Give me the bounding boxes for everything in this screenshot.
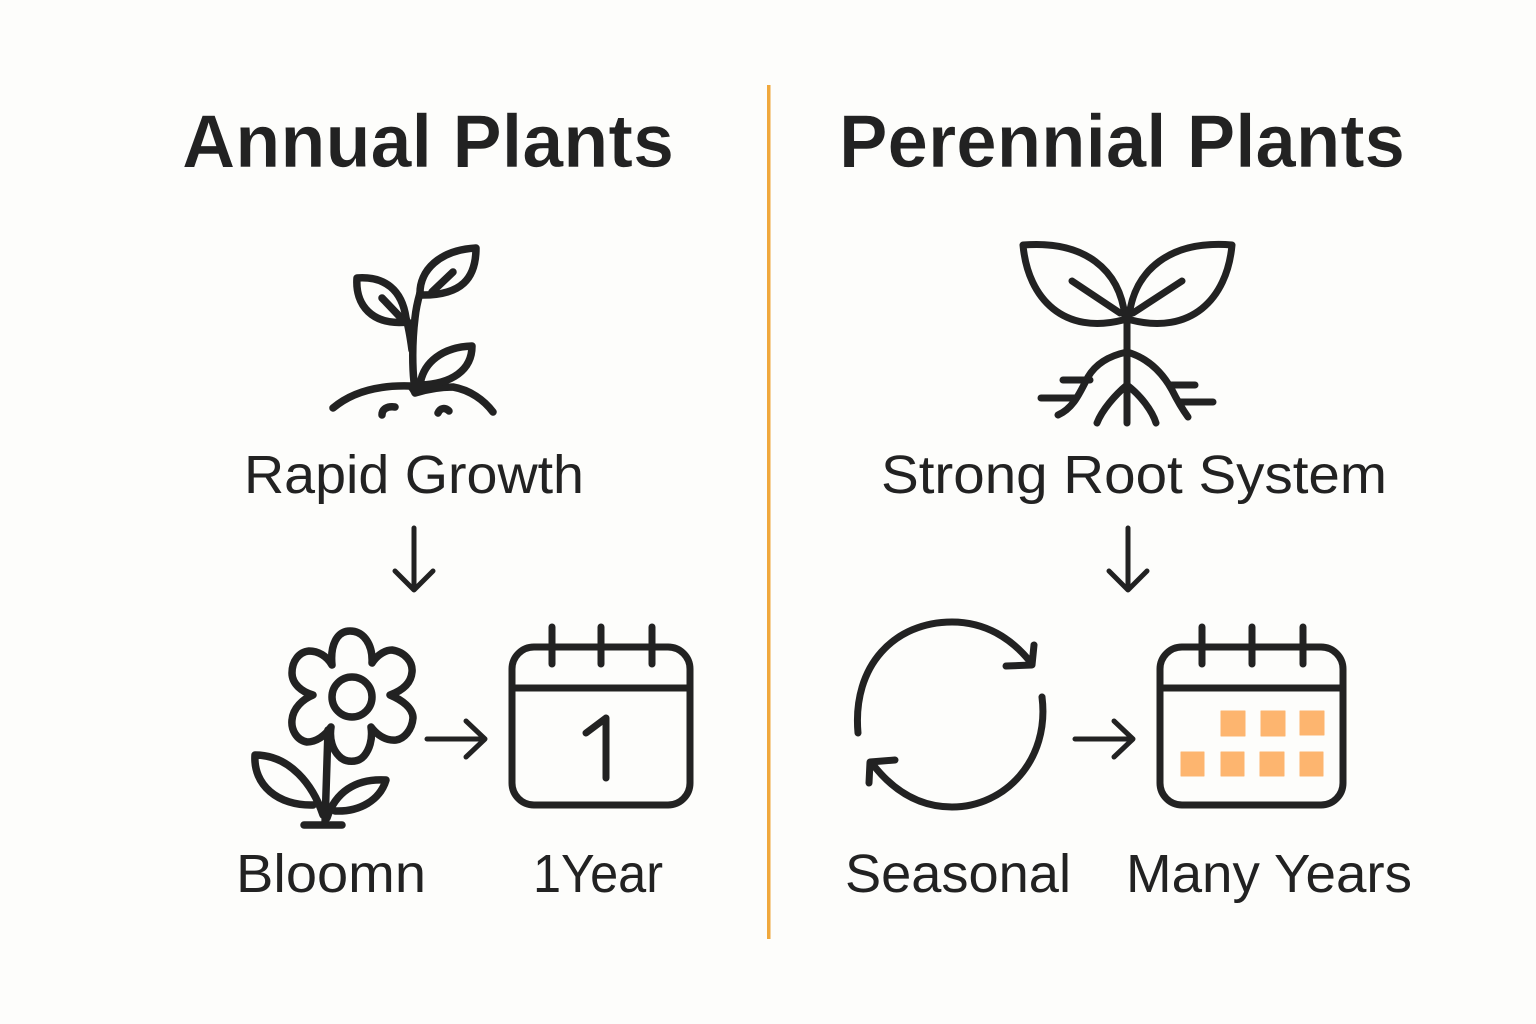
icon: roots plant	[1023, 244, 1232, 423]
arrow: root to seasonal	[1109, 528, 1147, 590]
label: Seasonal: Seasonal	[845, 844, 1071, 904]
label: Many Years: Many Years	[1126, 844, 1412, 904]
title: Perennial Plants: Perennial Plants	[839, 99, 1405, 183]
icon: calendar one year	[512, 627, 690, 805]
arrow: growth to bloom	[395, 528, 433, 590]
label: Bloomn: Bloomn	[236, 844, 426, 904]
title: Annual Plants: Annual Plants	[182, 99, 674, 183]
icon: calendar many years	[1160, 627, 1343, 805]
icon: flower	[255, 631, 413, 825]
icon: sprout	[333, 248, 493, 415]
icon: seasonal cycle	[857, 622, 1043, 807]
arrow: seasonal to many years	[1075, 721, 1133, 757]
label: 1Year: 1Year	[533, 844, 663, 904]
label: Rapid Growth: Rapid Growth	[244, 445, 584, 505]
arrow: bloom to one year	[427, 721, 485, 757]
center divider	[767, 85, 770, 939]
label: Strong Root System: Strong Root System	[881, 445, 1387, 505]
